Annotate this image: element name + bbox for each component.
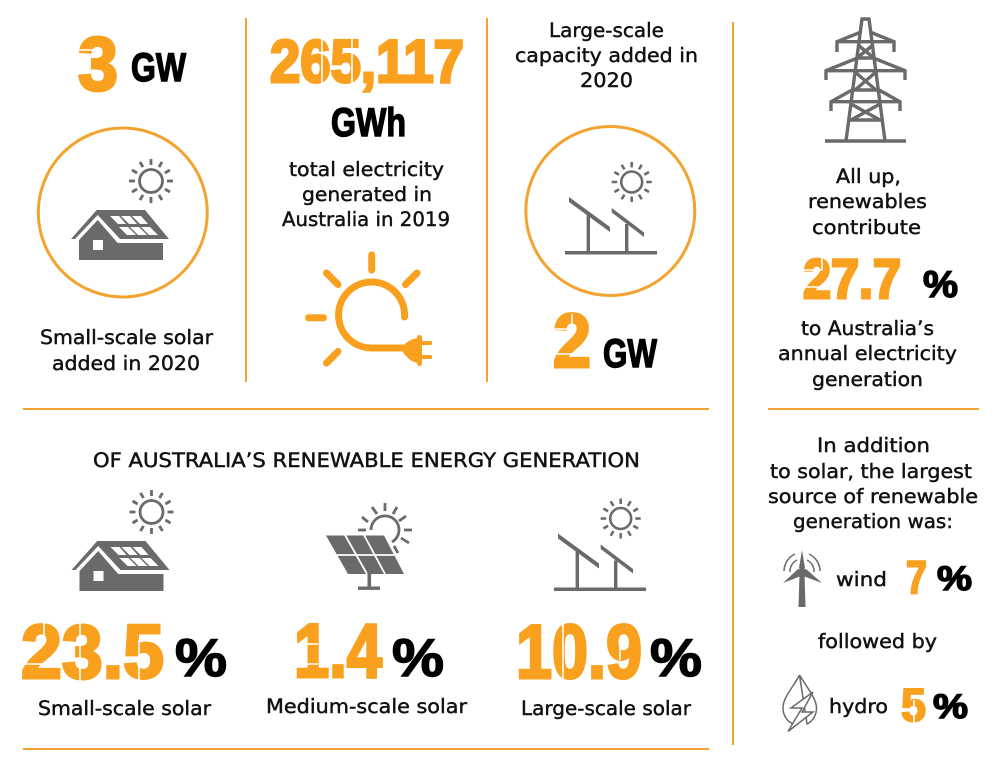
stat: 3 GW small-scale: 3 (78, 22, 118, 107)
stat: 2 GW large-scale: GW (603, 332, 657, 376)
text: to Australia's annual electricity generation (778, 317, 957, 391)
text: in addition to solar: In addition (817, 434, 930, 457)
panel: small-scale solar icon in circle (38, 128, 207, 297)
text: large-scale capacity added: 2020 (580, 69, 633, 92)
icon: ground-mounted solar (554, 498, 646, 591)
stat: 10.9 percent: 10.9 (516, 610, 642, 695)
text: all up renewables contribute: renewables (808, 190, 927, 213)
text: large-scale capacity added (515, 19, 698, 92)
text: to Australia's annual electricity generation: generation (812, 368, 923, 391)
stat: 265,117 GWh: 265,117 (270, 28, 464, 95)
text: total electricity generated: Australia in 2019 (282, 208, 450, 231)
stat: 3 GW small-scale (77, 22, 186, 107)
text: in addition to solar: generation was: (793, 510, 953, 533)
panel: large-scale solar icon in circle (526, 126, 695, 296)
label: small-scale solar added in 2020: Small-scale solar (40, 326, 214, 349)
stat: 23.5 percent: % (175, 629, 227, 688)
stat: 27.7 percent (802, 247, 958, 310)
stat: 5 percent: % (933, 688, 968, 726)
stat: 2 GW large-scale: 2 (553, 299, 591, 384)
text: followed by: followed by (818, 630, 937, 653)
labels: scale categories: Small-scale solar (38, 697, 212, 720)
stat: 265,117 GWh (270, 28, 464, 145)
stat: 5 percent (901, 679, 968, 731)
text: total electricity generated: generated in (302, 183, 432, 206)
text: total electricity generated: total electricity (289, 158, 444, 181)
stat: 265,117 GWh: GWh (331, 101, 406, 145)
icon: transmission tower (825, 19, 906, 141)
stat: 1.4 percent: 1.4 (294, 609, 382, 694)
text: hydro: hydro (829, 695, 888, 718)
icon: wind turbine (783, 550, 822, 607)
stat: 1.4 percent: % (392, 629, 444, 688)
text: in addition to solar: source of renewable (768, 485, 978, 508)
text: in addition to solar (768, 434, 978, 533)
text: in addition to solar: to solar, the largest (770, 460, 972, 483)
stat: 7 percent: 7 (906, 551, 927, 603)
icon: sun with plug (308, 255, 432, 366)
labels: scale categories (38, 695, 692, 720)
text: total electricity generated (282, 158, 450, 231)
icon: hydro drop with lightning (783, 675, 816, 732)
stat: 3 GW small-scale: GW (131, 46, 186, 90)
stat: 1.4 percent (293, 609, 444, 694)
stat: 27.7 percent: 27.7 (803, 247, 901, 310)
labels: scale categories: Medium-scale solar (266, 695, 468, 718)
stat: 2 GW large-scale (551, 299, 657, 384)
text: all up renewables contribute: All up, (836, 165, 901, 188)
stat: 23.5 percent: 23.5 (21, 610, 164, 695)
text: large-scale capacity added: Large-scale (549, 19, 664, 42)
text: to Australia's annual electricity generation: to Australia’s (801, 317, 934, 340)
icon: house with solar panels (72, 490, 174, 591)
label: small-scale solar added in 2020: added in 2020 (52, 352, 200, 375)
text: large-scale capacity added: capacity added in (515, 44, 698, 67)
label: small-scale solar added in 2020 (40, 326, 214, 375)
heading: of Australia's renewable energy generation: OF AUSTRALIA’S RENEWABLE ENERGY GENERATION (93, 449, 640, 472)
labels: scale categories: Large-scale solar (521, 697, 692, 720)
text: all up renewables contribute: contribute (812, 216, 921, 239)
stat: 27.7 percent: % (923, 264, 958, 305)
stat: 7 percent: % (937, 560, 972, 598)
icon: solar panel with sun (326, 503, 412, 590)
stat: 7 percent (906, 551, 972, 603)
text: all up renewables contribute (808, 165, 927, 239)
text: wind: wind (836, 568, 887, 591)
text: to Australia's annual electricity generation: annual electricity (778, 342, 957, 365)
stat: 10.9 percent: % (650, 629, 702, 688)
stat: 5 percent: 5 (901, 679, 926, 731)
